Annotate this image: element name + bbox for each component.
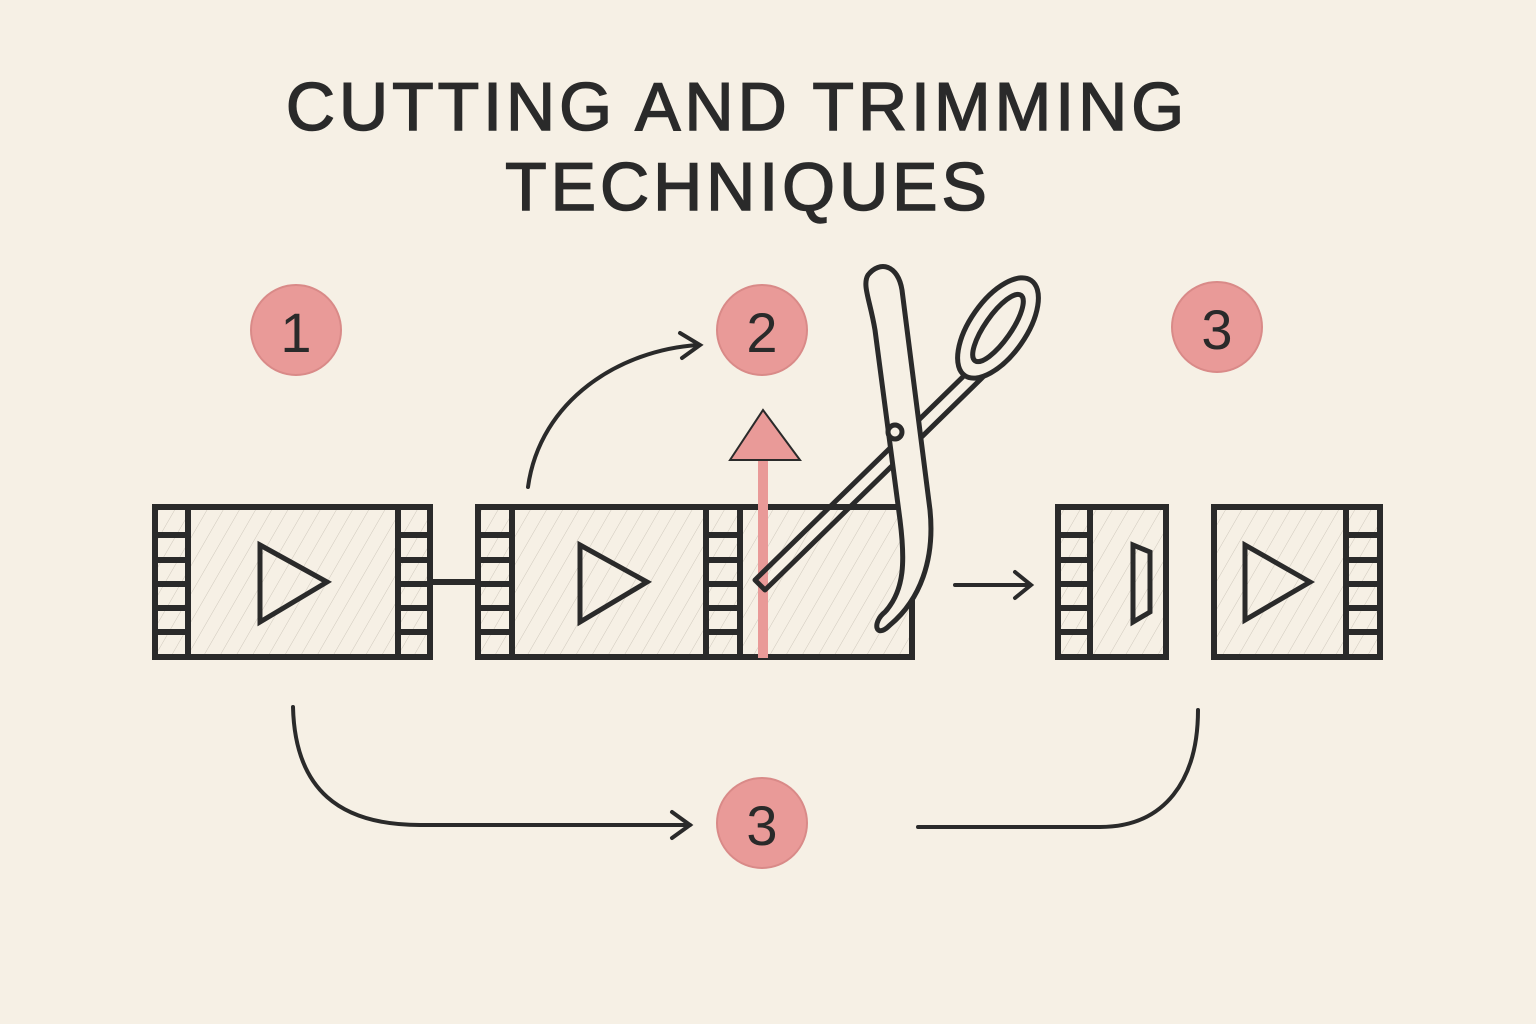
- film clip 2 being cut: [478, 507, 912, 657]
- arrow to trimmed clips: [955, 572, 1031, 598]
- step 1 badge: [251, 285, 341, 375]
- step 3 badge bottom: 3: [746, 794, 778, 857]
- step 3 badge top: 3: [1201, 298, 1233, 361]
- step 3 badge top: [1172, 282, 1262, 372]
- step 2 badge: 2: [746, 301, 778, 364]
- step 1 badge: 1: [280, 301, 312, 364]
- film clip 4: [1214, 507, 1380, 657]
- connector: [430, 579, 478, 585]
- film clip 3 trimmed: [1058, 507, 1166, 657]
- step 2 badge: [717, 285, 807, 375]
- scissors icon: [755, 264, 1054, 631]
- step 3 badge bottom: [717, 778, 807, 868]
- title: [286, 69, 1188, 225]
- title: CUTTING AND TRIMMING: [286, 69, 1188, 145]
- bottom left curved arrow: [293, 707, 690, 838]
- title: TECHNIQUES: [505, 149, 991, 225]
- cut marker arrow: [730, 410, 800, 658]
- curved arrow to step 2: [528, 333, 700, 487]
- film clip 1: [155, 507, 430, 657]
- bottom right curve: [918, 710, 1198, 827]
